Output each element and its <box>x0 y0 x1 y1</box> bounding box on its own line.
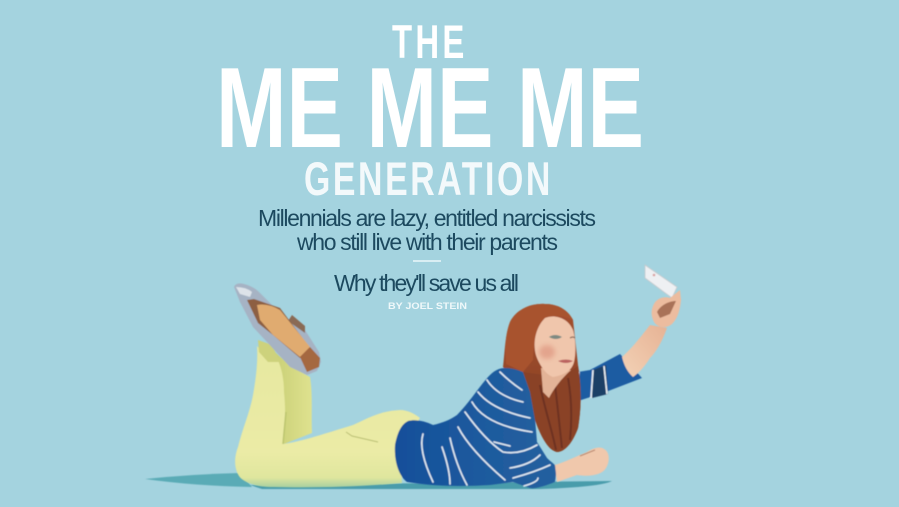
tagline: Why they'll save us all <box>334 270 519 296</box>
hair strands <box>540 378 571 450</box>
title: ME ME ME: ME ME ME <box>216 45 644 172</box>
byline: BY JOEL STEIN <box>388 301 467 312</box>
figure: woman taking a selfie <box>234 265 681 488</box>
shoe <box>234 283 321 375</box>
lips <box>558 360 573 363</box>
neck <box>541 368 571 398</box>
raised sleeve <box>578 354 642 401</box>
back calf <box>274 352 312 444</box>
raised arm <box>622 325 667 377</box>
ankle shading <box>258 340 280 362</box>
subtitle line 1: Millennials are lazy, entitled narcissists <box>258 205 596 231</box>
legs <box>235 346 420 487</box>
hand <box>652 290 681 327</box>
knee fold <box>283 412 286 444</box>
floor shadow <box>145 473 612 489</box>
subtitle line 2: who still live with their parents <box>296 229 558 255</box>
torso shirt <box>395 368 557 488</box>
phone <box>645 265 677 298</box>
face <box>535 316 575 377</box>
hair back <box>503 304 581 452</box>
eye <box>549 335 575 339</box>
lower forearm <box>555 448 609 482</box>
pocket seam <box>346 432 378 442</box>
title: THE: THE <box>392 15 468 68</box>
shirt stripes <box>422 372 550 486</box>
cheek <box>539 345 555 359</box>
hair front <box>523 366 581 452</box>
title: GENERATION: GENERATION <box>304 153 553 205</box>
